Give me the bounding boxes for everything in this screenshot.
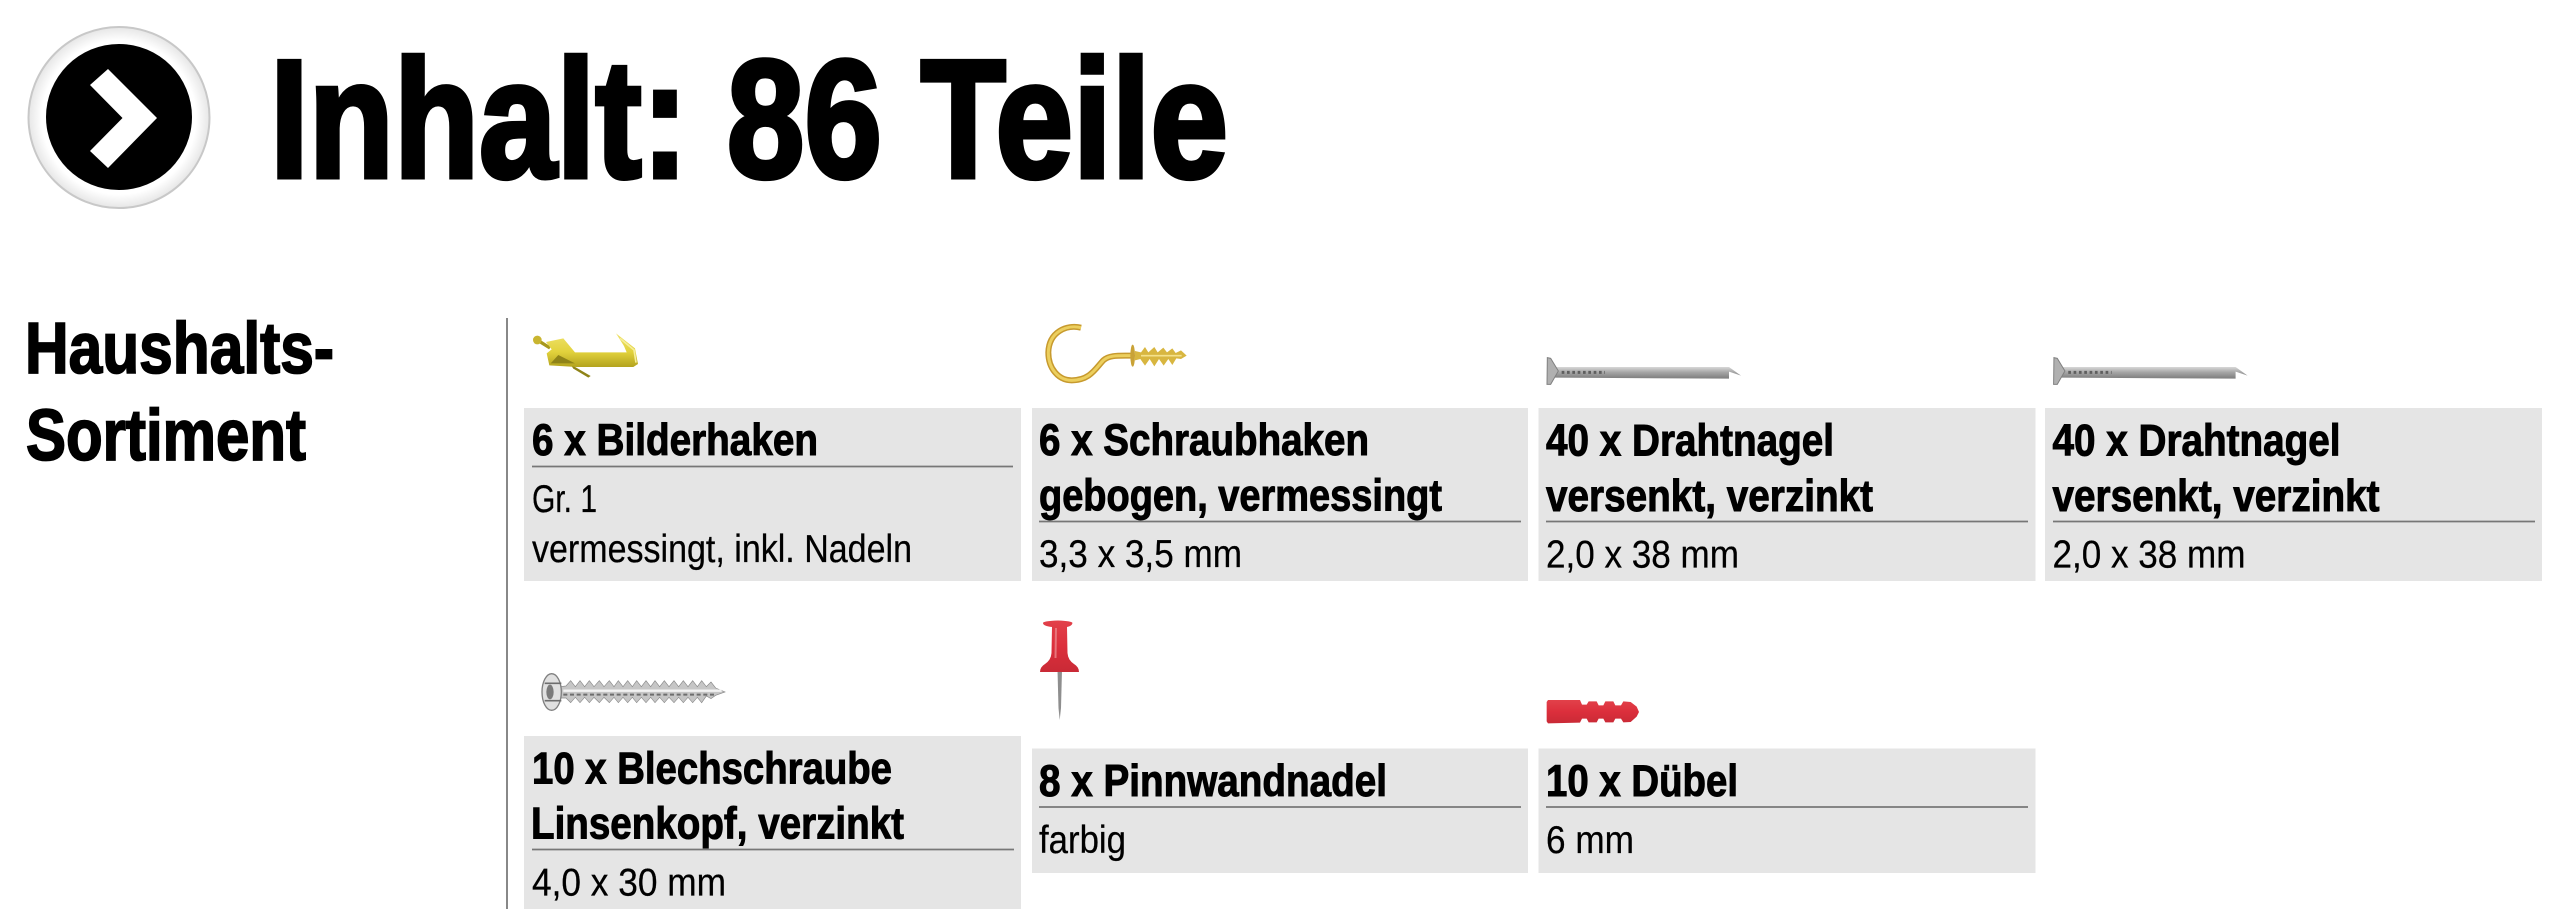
- item heading: 10 x Blechschraube: [532, 744, 892, 794]
- section heading: Haushalts-: [25, 309, 334, 389]
- icon: wall plug: [1547, 700, 1639, 723]
- item heading: [2052, 416, 2380, 521]
- info card: [1538, 408, 2036, 581]
- item: Dübel: [1538, 700, 2036, 873]
- item heading: 10 x Dübel: [1546, 757, 1738, 806]
- item: Blechschraube: [524, 674, 1021, 909]
- icon: wire nail: [1547, 358, 1741, 384]
- item heading: 40 x Drahtnagel: [1546, 416, 1834, 466]
- item heading: Linsenkopf, verzinkt: [531, 800, 904, 848]
- item heading: versenkt, verzinkt: [1546, 472, 1873, 521]
- icon: wire nail: [2054, 358, 2248, 384]
- item heading: 8 x Pinnwandnadel: [1039, 757, 1387, 806]
- item: Bilderhaken: [524, 333, 1021, 581]
- section heading: [25, 309, 334, 476]
- item heading: versenkt, verzinkt: [2052, 472, 2380, 521]
- item details: 4,0 x 30 mm: [532, 862, 726, 904]
- item: Schraubhaken: [1032, 327, 1528, 581]
- item heading: [1039, 416, 1442, 520]
- info card: [1032, 408, 1528, 581]
- info card: [1032, 748, 1528, 873]
- icon: sheet metal screw: [542, 674, 725, 710]
- section heading: Sortiment: [26, 396, 306, 476]
- item details: vermessingt, inkl. Nadeln: [532, 528, 912, 571]
- item details: Gr. 1: [532, 478, 597, 521]
- icon: push pin: [1040, 620, 1079, 720]
- item: Drahtnagel 1: [1538, 358, 2036, 581]
- item heading: [531, 744, 904, 848]
- item details: 2,0 x 38 mm: [1546, 534, 1739, 576]
- item heading: 6 x Bilderhaken: [532, 416, 818, 465]
- item details: 3,3 x 3,5 mm: [1039, 533, 1242, 576]
- item heading: 6 x Schraubhaken: [1039, 416, 1369, 465]
- icon: screw hook: [1048, 327, 1187, 380]
- info card: [524, 408, 1021, 581]
- item details: [532, 478, 912, 571]
- item: Pinnwandnadel: [1032, 620, 1528, 873]
- item heading: 40 x Drahtnagel: [2052, 416, 2340, 466]
- info card: [524, 736, 1021, 909]
- info card: [2045, 408, 2542, 581]
- info card: [1538, 748, 2036, 873]
- icon: picture hook: [533, 333, 638, 378]
- item heading: [1546, 416, 1873, 521]
- item details: farbig: [1039, 819, 1126, 862]
- item details: 2,0 x 38 mm: [2052, 534, 2246, 576]
- item details: 6 mm: [1546, 819, 1634, 862]
- title: Inhalt: 86 Teile: [270, 25, 1228, 213]
- item heading: gebogen, vermessingt: [1039, 472, 1442, 520]
- item: Drahtnagel 2: [2045, 358, 2542, 581]
- icon: chevron button: [28, 27, 210, 208]
